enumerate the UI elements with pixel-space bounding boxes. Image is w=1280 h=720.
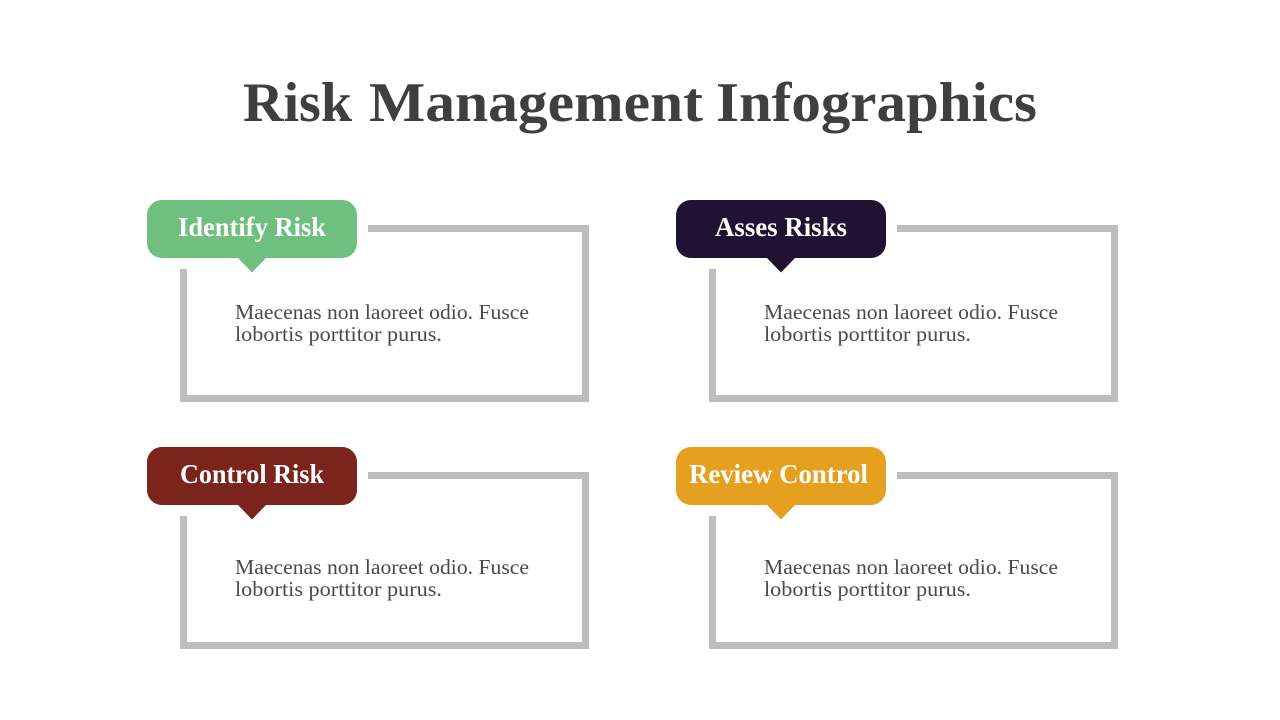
panel frame: control risk bbox=[184, 476, 586, 646]
heading: review control: Review Control bbox=[689, 459, 868, 489]
text block: control risk: Maecenas non laoreet odio. Fusce bbox=[235, 555, 529, 579]
callout: review control bbox=[676, 447, 886, 520]
heading: identify risk: Identify Risk bbox=[178, 212, 326, 242]
panel: review control bbox=[676, 447, 1114, 646]
text block: identify risk: lobortis porttitor purus. bbox=[235, 322, 442, 346]
panel: identify risk bbox=[147, 200, 586, 398]
title: Management bbox=[369, 72, 703, 134]
text block: review control: lobortis porttitor purus. bbox=[764, 577, 971, 601]
heading: asses risks: Asses Risks bbox=[715, 212, 847, 242]
callout: control risk bbox=[147, 447, 357, 520]
callout: asses risks bbox=[676, 200, 886, 272]
text block: asses risks: lobortis porttitor purus. bbox=[764, 322, 971, 346]
panel frame: identify risk bbox=[184, 228, 586, 398]
panel frame: review control bbox=[712, 476, 1114, 646]
panel frame: asses risks bbox=[712, 228, 1114, 398]
title: Risk bbox=[243, 72, 353, 134]
title: Infographics bbox=[716, 72, 1037, 134]
heading: control risk: Control Risk bbox=[180, 459, 324, 489]
text block: identify risk: Maecenas non laoreet odio. Fusce bbox=[235, 300, 529, 324]
text block: review control: Maecenas non laoreet odio. Fusce bbox=[764, 555, 1058, 579]
panel: asses risks bbox=[676, 200, 1114, 398]
text block: asses risks: Maecenas non laoreet odio. Fusce bbox=[764, 300, 1058, 324]
callout: identify risk bbox=[147, 200, 357, 272]
panel: control risk bbox=[147, 447, 586, 646]
text block: control risk: lobortis porttitor purus. bbox=[235, 577, 442, 601]
